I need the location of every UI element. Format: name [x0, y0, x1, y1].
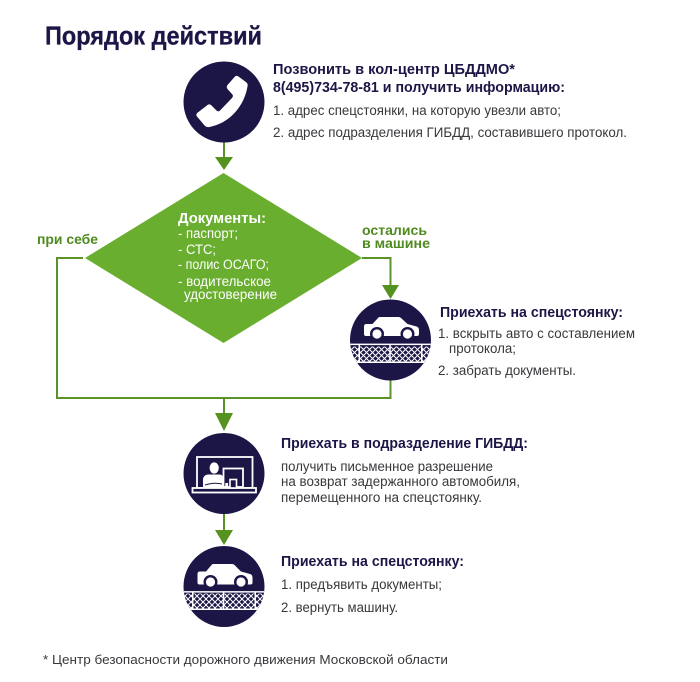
- text block: go to impound lot, return car: [281, 554, 464, 615]
- label: left in the car: [362, 222, 430, 251]
- connector: right branch to impound lot: [362, 258, 399, 299]
- decision diamond: documents: [85, 173, 362, 343]
- label: with you: при себе: [37, 231, 98, 247]
- text block: go to traffic police: перемещенного на спецстоянку.: [281, 490, 482, 505]
- text block: call centre: 2. адрес подразделения ГИБДД, составившего протокол.: [273, 125, 627, 140]
- decision diamond: documents: Документы:: [178, 210, 266, 227]
- icon: traffic police window: [184, 433, 264, 514]
- text block: call centre: Позвонить в кол-центр ЦБДДМО*: [273, 62, 515, 78]
- text block: go to impound lot, return car: 2. вернуть машину.: [281, 600, 398, 615]
- text block: go to impound lot, open car: 2. забрать документы.: [438, 363, 576, 378]
- text block: go to traffic police: на возврат задержанного автомобиля,: [281, 474, 520, 489]
- text block: go to traffic police: получить письменное разрешение: [281, 459, 493, 474]
- text block: call centre: 8(495)734-78-81 и получить информацию:: [273, 80, 565, 96]
- footnote: * Центр безопасности дорожного движения Московской области: [43, 652, 448, 667]
- icon: car at impound lot: [350, 300, 432, 380]
- label: left in the car: в машине: [362, 235, 430, 251]
- text block: go to traffic police: [281, 436, 528, 505]
- text block: go to impound lot, return car: 1. предъявить документы;: [281, 577, 442, 592]
- text block: go to impound lot, open car: 1. вскрыть авто с составлением: [438, 326, 635, 341]
- title: Порядок действий: [45, 20, 262, 50]
- decision diamond: documents: - СТС;: [178, 242, 216, 257]
- connector: impound lot to merge: [224, 380, 390, 398]
- text block: go to impound lot, return car: Приехать на спецстоянку:: [281, 554, 464, 570]
- text block: call centre: 1. адрес спецстоянки, на которую увезли авто;: [273, 103, 561, 118]
- icon: phone: [184, 62, 264, 142]
- text block: go to traffic police: Приехать в подразделение ГИБДД:: [281, 436, 528, 452]
- connector: left branch: [57, 258, 224, 398]
- decision diamond: documents: - водительское: [178, 274, 271, 289]
- decision diamond: documents: - полис ОСАГО;: [178, 257, 269, 272]
- arrow: traffic police to impound lot: [215, 514, 233, 545]
- text block: go to impound lot, open car: протокола;: [449, 341, 516, 356]
- text block: call centre: [273, 62, 627, 140]
- text block: go to impound lot, open car: [438, 305, 635, 378]
- decision diamond: documents: - паспорт;: [178, 226, 238, 241]
- icon: car at impound lot, final step: [183, 546, 265, 627]
- arrow: merge to traffic police: [215, 398, 233, 431]
- arrow: phone to documents: [215, 142, 233, 170]
- decision diamond: documents: удостоверение: [184, 287, 277, 302]
- label: left in the car: остались: [362, 222, 427, 238]
- text block: go to impound lot, open car: Приехать на спецстоянку:: [440, 305, 623, 321]
